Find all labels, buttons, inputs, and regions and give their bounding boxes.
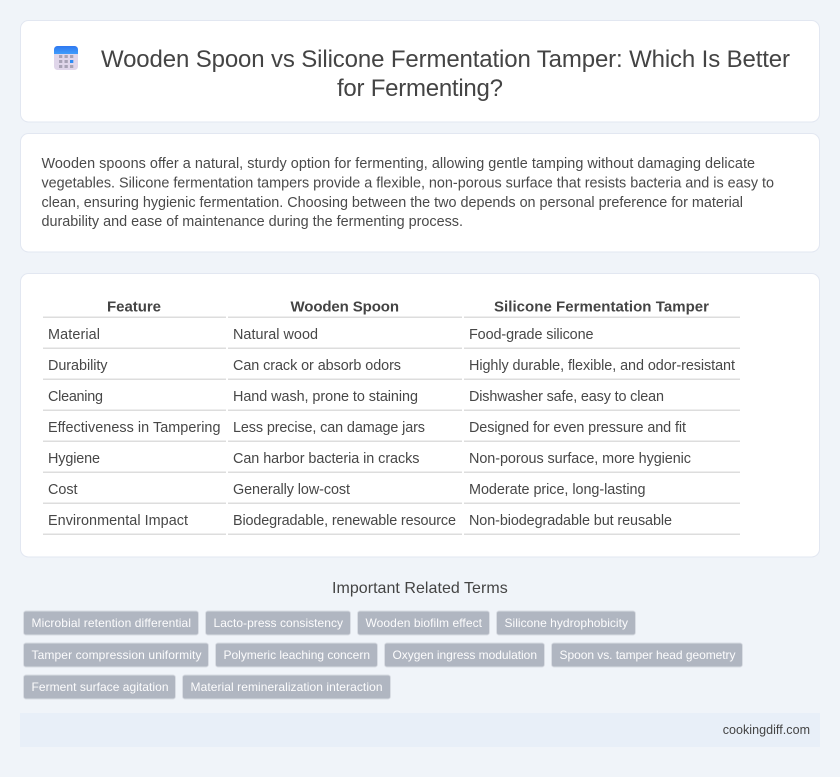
row: effectiveness	[48, 420, 686, 436]
text block: summary paragraph: vegetables. Silicone fermentation tampers provide a flexible, non-porous surface that resists bacteria and is easy to	[42, 176, 774, 192]
row: cost	[48, 482, 646, 498]
text block: summary paragraph	[42, 156, 774, 230]
row: cost: Moderate price, long-lasting	[469, 482, 646, 498]
row: effectiveness: Less precise, can damage jars	[233, 420, 425, 436]
tag	[24, 611, 198, 635]
row: durability: Highly durable, flexible, and odor-resistant	[469, 358, 735, 374]
row: environmental impact: Non-biodegradable but reusable	[469, 513, 672, 529]
tag: Silicone hydrophobicity	[504, 616, 628, 630]
row: material: Natural wood	[233, 327, 318, 343]
row: cleaning	[48, 389, 664, 405]
table header	[107, 298, 709, 316]
panel: comparison table	[20, 274, 820, 557]
row: environmental impact	[48, 513, 672, 529]
row: durability: Durability	[48, 358, 108, 374]
row: cleaning: Cleaning	[48, 389, 103, 405]
tag	[182, 675, 390, 699]
row: cleaning: Hand wash, prone to staining	[233, 389, 418, 405]
row: material: Food-grade silicone	[469, 327, 594, 343]
title: Wooden Spoon vs Silicone Fermentation Tamper: Which Is Better	[101, 46, 790, 73]
tag: Ferment surface agitation	[32, 680, 168, 694]
tag: Spoon vs. tamper head geometry	[560, 648, 736, 662]
row: hygiene	[48, 451, 691, 467]
table header: Wooden Spoon	[290, 298, 399, 316]
row: cost: Cost	[48, 482, 78, 498]
tag: Wooden biofilm effect	[366, 616, 483, 630]
tag: Oxygen ingress modulation	[392, 648, 537, 662]
footer	[20, 713, 820, 747]
heading: related terms: Important Related Terms	[332, 580, 508, 597]
row: durability	[48, 358, 735, 374]
tag: Material remineralization interaction	[190, 680, 382, 694]
row: cost: Generally low-cost	[233, 482, 350, 498]
tag: Polymeric leaching concern	[224, 648, 370, 662]
tag	[216, 643, 378, 667]
tag	[24, 675, 176, 699]
tag	[496, 611, 636, 635]
tag	[358, 611, 490, 635]
row: environmental impact: Biodegradable, renewable resource	[233, 513, 456, 529]
panel: title card	[20, 20, 820, 122]
tag	[384, 643, 544, 667]
related term tags	[24, 611, 742, 699]
row: cleaning: Dishwasher safe, easy to clean	[469, 389, 664, 405]
row: material: Material	[48, 327, 100, 343]
text block: summary paragraph: durability and ease of maintenance during the fermenting process.	[42, 214, 463, 230]
icon: calendar	[54, 46, 78, 70]
title: for Fermenting?	[337, 75, 503, 102]
table header: Feature	[107, 298, 161, 316]
tag	[552, 643, 742, 667]
row: effectiveness: Designed for even pressure and fit	[469, 420, 686, 436]
tag: Lacto-press consistency	[214, 616, 343, 630]
row: hygiene: Can harbor bacteria in cracks	[233, 451, 420, 467]
row: hygiene: Non-porous surface, more hygienic	[469, 451, 691, 467]
row: environmental impact: Environmental Impact	[48, 513, 188, 529]
table header: Silicone Fermentation Tamper	[494, 298, 709, 316]
text block: summary paragraph: clean, ensuring hygienic fermentation. Choosing between the two depends on personal preference for material	[42, 195, 743, 211]
row: material	[48, 327, 594, 343]
tag: Microbial retention differential	[32, 616, 191, 630]
title	[101, 46, 790, 102]
tag	[24, 643, 208, 667]
tag: Tamper compression uniformity	[32, 648, 202, 662]
row: effectiveness: Effectiveness in Tampering	[48, 420, 220, 436]
row: hygiene: Hygiene	[48, 451, 100, 467]
row: durability: Can crack or absorb odors	[233, 358, 401, 374]
text block: summary paragraph: Wooden spoons offer a natural, sturdy option for fermenting, allowing gentle tamping without damaging delicate	[42, 156, 755, 172]
footer: cookingdiff.com	[723, 723, 810, 737]
panel: summary	[20, 134, 820, 252]
tag	[206, 611, 350, 635]
